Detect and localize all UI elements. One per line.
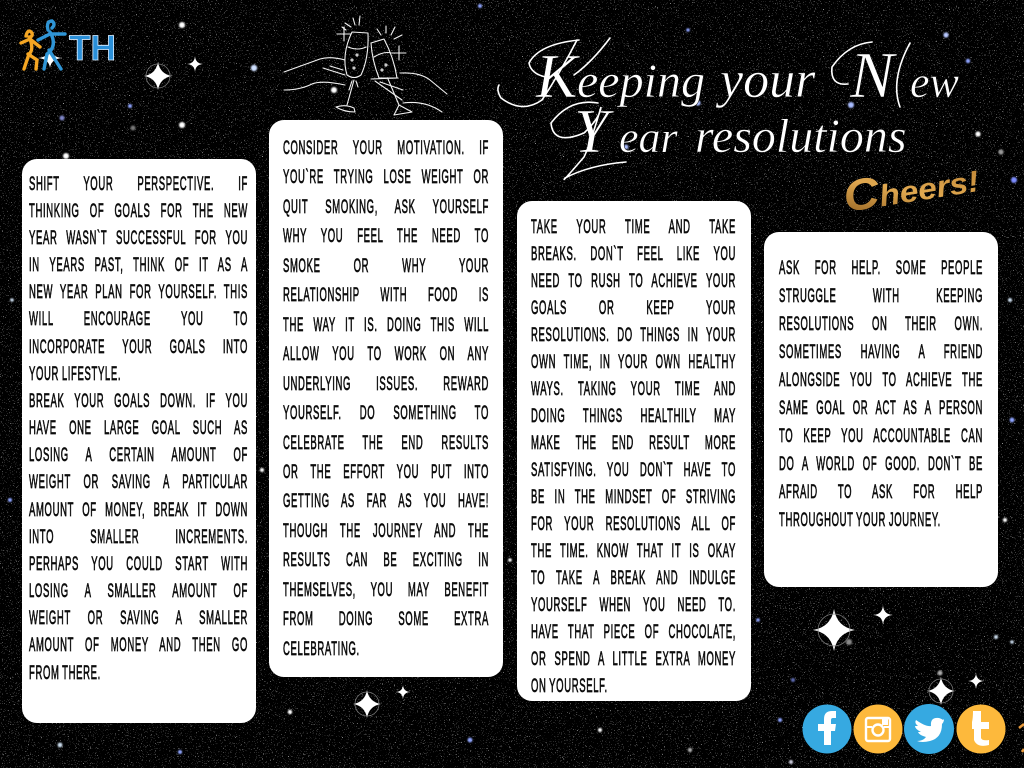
text: motivation and reward: RESULTS CAN BE EXCITING IN: [283, 550, 489, 571]
icon: facebook: [802, 704, 852, 754]
text: motivation and reward: ALLOW YOU TO WORK ON ANY: [283, 344, 489, 365]
text: time and breaks: YOURSELF WHEN YOU NEED TO.: [531, 594, 736, 616]
text: motivation and reward: FROM DOING SOME EXTRA: [283, 609, 489, 630]
text: motivation and reward: OR THE EFFORT YOU PUT INTO: [283, 462, 489, 483]
decorative corner streaks: [1019, 724, 1024, 752]
text: asking for help: SOMETIMES HAVING A FRIEND: [779, 342, 983, 362]
icon: tumblr: [956, 704, 1006, 754]
text: time and breaks: FOR YOUR RESOLUTIONS ALL OF: [531, 514, 736, 534]
text: time and breaks: [530, 216, 736, 696]
text: motivation and reward: QUIT SMOKING, ASK YOURSELF: [283, 197, 489, 218]
text: motivation and reward: SMOKE OR WHY YOUR: [283, 256, 489, 277]
text: time and breaks: OR SPEND A LITTLE EXTRA MONEY: [531, 648, 736, 670]
text: perspective and goals: HAVE ONE LARGE GOAL SUCH AS: [29, 418, 248, 439]
panel: take your time: [517, 201, 751, 701]
icon: blue figure: [38, 21, 65, 69]
title: eeping: [577, 55, 717, 108]
text: asking for help: RESOLUTIONS ON THEIR OWN.: [779, 314, 983, 334]
text: time and breaks: MAKE THE END RESULT MORE: [531, 432, 736, 454]
text: time and breaks: HAVE THAT PIECE OF CHOCOLATE,: [531, 622, 736, 642]
text: motivation and reward: THE WAY IT IS. DOING THIS WILL: [283, 315, 489, 336]
text: motivation and reward: CONSIDER YOUR MOTIVATION. IF: [283, 138, 489, 159]
text: time and breaks: DOING THINGS HEALTHILY MAY: [531, 406, 736, 426]
panel: consider your motivation: [269, 120, 503, 677]
text: time and breaks: GOALS OR KEEP YOUR: [531, 298, 736, 318]
title: N: [849, 39, 898, 112]
cheers lettering: Cheers!: [840, 152, 982, 222]
text: motivation and reward: CELEBRATING.: [283, 639, 360, 660]
text: perspective and goals: WEIGHT OR SAVING A PARTICULAR: [29, 472, 248, 493]
left hand: [284, 58, 345, 72]
text: motivation and reward: [282, 138, 489, 660]
title: ear: [619, 113, 689, 162]
text: motivation and reward: THOUGH THE JOURNEY AND THE: [283, 521, 489, 542]
title: ew: [910, 58, 960, 107]
text: perspective and goals: FROM THERE.: [29, 663, 101, 684]
text: asking for help: AFRAID TO ASK FOR HELP: [779, 482, 983, 502]
panel: shift your perspective: [22, 159, 256, 723]
text: asking for help: ALONGSIDE YOU TO ACHIEVE THE: [779, 370, 983, 390]
text: perspective and goals: YOUR LIFESTYLE.: [29, 364, 121, 385]
text: perspective and goals: WEIGHT OR SAVING A SMALLER: [29, 608, 248, 629]
text: time and breaks: TAKE YOUR TIME AND TAKE: [531, 216, 736, 238]
text: perspective and goals: THINKING OF GOALS FOR THE NEW: [29, 201, 248, 222]
text: time and breaks: TO TAKE A BREAK AND INDULGE: [531, 568, 736, 588]
right glass: [371, 39, 397, 78]
text: time and breaks: OWN TIME, IN YOUR OWN HEALTHY: [531, 352, 736, 372]
text: perspective and goals: BREAK YOUR GOALS DOWN. IF YOU: [29, 391, 248, 412]
title: your: [715, 52, 828, 109]
text: asking for help: THROUGHOUT YOUR JOURNEY.: [779, 510, 941, 530]
icon: instagram: [854, 704, 902, 754]
text: perspective and goals: INCORPORATE YOUR GOALS INTO: [29, 337, 248, 358]
text: motivation and reward: UNDERLYING ISSUES. REWARD: [283, 374, 489, 395]
text: motivation and reward: WHY YOU FEEL THE NEED TO: [283, 226, 489, 247]
text: perspective and goals: IN YEARS PAST, THINK OF IT AS A: [29, 255, 248, 276]
text: time and breaks: ON YOURSELF.: [531, 676, 608, 696]
text: asking for help: ASK FOR HELP. SOME PEOPLE: [779, 258, 983, 278]
text: motivation and reward: RELATIONSHIP WITH FOOD IS: [283, 285, 489, 306]
title: resolutions: [695, 110, 907, 163]
text: perspective and goals: YEAR WASN`T SUCCESSFUL FOR YOU: [29, 228, 248, 249]
text: time and breaks: WAYS. TAKING YOUR TIME AND: [531, 378, 736, 400]
burst lines: [342, 16, 402, 39]
title: Y: [574, 98, 614, 166]
text: perspective and goals: PERHAPS YOU COULD START WITH: [29, 554, 248, 575]
text: perspective and goals: LOSING A CERTAIN AMOUNT OF: [29, 445, 248, 466]
text: perspective and goals: NEW YEAR PLAN FOR YOURSELF. THIS: [29, 282, 248, 303]
text: time and breaks: BE IN THE MINDSET OF STRIVING: [531, 486, 736, 508]
text: perspective and goals: INTO SMALLER INCREMENTS.: [29, 527, 248, 548]
title: K: [535, 43, 581, 111]
text: perspective and goals: SHIFT YOUR PERSPECTIVE. IF: [29, 174, 248, 194]
text: asking for help: [778, 258, 983, 530]
logo wordmark: TH: [69, 29, 116, 68]
text: time and breaks: RESOLUTIONS. DO THINGS IN YOUR: [531, 324, 736, 346]
text: time and breaks: NEED TO RUSH TO ACHIEVE YOUR: [531, 270, 736, 292]
left glass: [345, 32, 368, 78]
right hand: [371, 78, 398, 79]
text: perspective and goals: WILL ENCOURAGE YOU TO: [29, 309, 248, 330]
icon: orange figure: [21, 31, 40, 69]
text: time and breaks: BREAKS. DON`T FEEL LIKE YOU: [531, 244, 736, 264]
icon: twitter: [904, 704, 954, 754]
text: motivation and reward: YOU`RE TRYING LOSE WEIGHT OR: [283, 167, 489, 188]
text: time and breaks: SATISFYING. YOU DON`T HAVE TO: [531, 460, 736, 480]
text: motivation and reward: CELEBRATE THE END RESULTS: [283, 433, 489, 454]
text: time and breaks: THE TIME. KNOW THAT IT IS OKAY: [531, 540, 736, 562]
text: asking for help: TO KEEP YOU ACCOUNTABLE CAN: [779, 426, 983, 446]
text: asking for help: STRUGGLE WITH KEEPING: [779, 286, 983, 306]
text: perspective and goals: LOSING A SMALLER AMOUNT OF: [29, 581, 248, 602]
text: asking for help: DO A WORLD OF GOOD. DON`T BE: [779, 454, 983, 474]
text: motivation and reward: THEMSELVES, YOU MAY BENEFIT: [283, 580, 489, 601]
text: perspective and goals: AMOUNT OF MONEY AND THEN GO: [29, 635, 248, 656]
text: perspective and goals: [28, 174, 248, 684]
title swashes: [498, 38, 910, 179]
text: perspective and goals: AMOUNT OF MONEY, BREAK IT DOWN: [29, 500, 248, 521]
text: asking for help: SAME GOAL OR ACT AS A PERSON: [779, 398, 983, 418]
text: motivation and reward: GETTING AS FAR AS YOU HAVE!: [283, 491, 489, 512]
text: motivation and reward: YOURSELF. DO SOMETHING TO: [283, 403, 489, 424]
panel: ask for help: [764, 232, 998, 587]
